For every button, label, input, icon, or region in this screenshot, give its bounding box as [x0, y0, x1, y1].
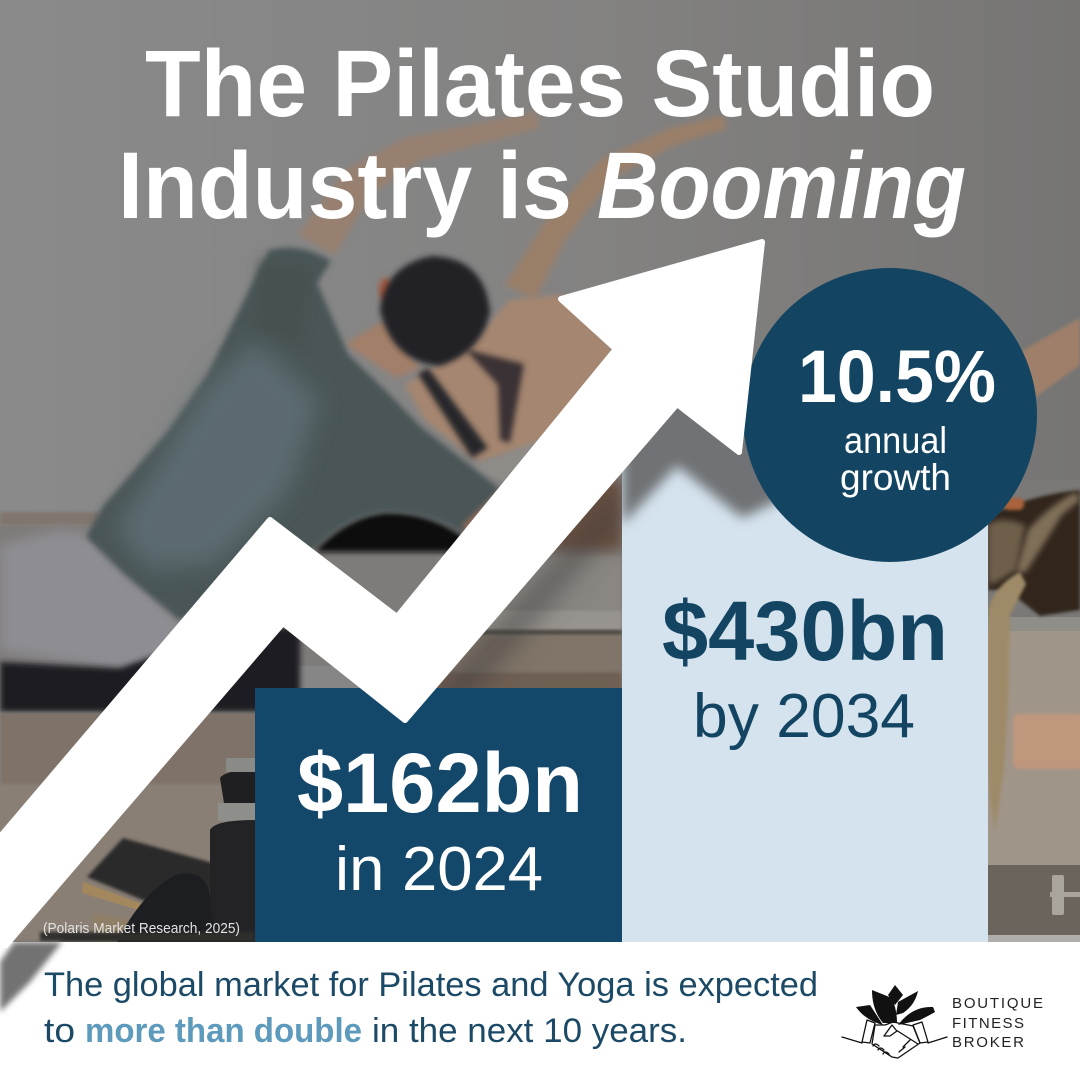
footer text [44, 966, 818, 1050]
title [118, 31, 966, 239]
logo wordmark: FITNESS [952, 1015, 1024, 1032]
arrow shadow on footer [0, 942, 62, 1012]
bar: 2024 market size [255, 688, 622, 942]
right side scene [988, 480, 1080, 942]
black rollers [117, 874, 215, 942]
growth badge text [798, 335, 996, 498]
far right woman's arm [1020, 318, 1080, 398]
dark reformer band [0, 625, 300, 712]
footer text: in the next 10 years. [372, 1012, 687, 1050]
title: Booming [597, 133, 966, 239]
2034 value: by 2034 [693, 682, 915, 751]
logo wordmark: BROKER [952, 1034, 1024, 1051]
man's shirt [86, 248, 500, 620]
2024 value: $162bn [297, 736, 583, 830]
bra back [465, 349, 524, 443]
reformer pad [87, 838, 213, 903]
man's neck [345, 320, 420, 378]
arrow shadow on bar [622, 408, 778, 528]
icon: handshake [842, 1020, 947, 1058]
footer text: The global market for Pilates and Yoga is expected [44, 966, 818, 1004]
icon: lotus [856, 985, 935, 1025]
circle: growth badge backing [743, 268, 1037, 562]
bra strap [418, 368, 488, 458]
hair [988, 490, 1080, 616]
ponytail [988, 572, 1026, 830]
growth badge text: 10.5% [798, 335, 996, 418]
woman's back [405, 295, 620, 462]
wooden pad base [82, 882, 142, 910]
bar: 2034 market size [622, 400, 988, 942]
man's arm [298, 112, 540, 255]
lower floor bands [0, 712, 255, 785]
growth badge text: growth [840, 457, 951, 498]
far woman's arm [505, 115, 728, 300]
logo: lotus and handshake [842, 985, 947, 1058]
2024 value [297, 736, 583, 904]
reformer column [210, 820, 255, 942]
growth badge text: annual [844, 420, 947, 461]
growth arrow [0, 242, 762, 945]
arrow shadow on photo [437, 493, 622, 688]
2034 value [662, 584, 948, 751]
logo wordmark [952, 995, 1043, 1051]
man's head [380, 256, 490, 366]
source note: (Polaris Market Research, 2025) [43, 921, 240, 937]
logo wordmark: BOUTIQUE [952, 995, 1043, 1012]
hand and wrist [460, 490, 496, 532]
2034 value: $430bn [662, 584, 948, 678]
reformer knob [220, 770, 255, 803]
2024 value: in 2024 [335, 835, 543, 904]
footer text: more than double [85, 1012, 362, 1050]
footer panel [0, 942, 1080, 1080]
title: Industry is [118, 133, 572, 239]
title: The Pilates Studio [145, 31, 935, 137]
reformer carriage [317, 512, 480, 552]
man's pants [0, 530, 190, 672]
footer text: to [44, 1012, 75, 1050]
